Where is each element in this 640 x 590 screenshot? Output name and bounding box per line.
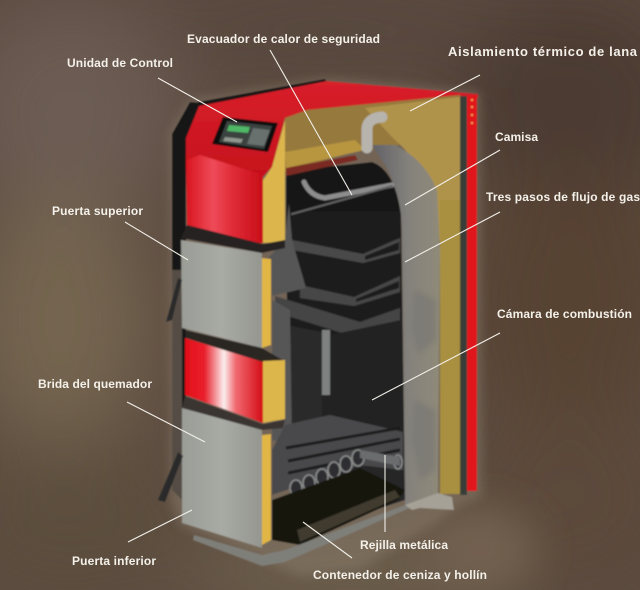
baffle inner shadow [365,242,399,260]
camisa blotches [412,290,436,480]
safety heat exhaust pipe [292,117,392,214]
right foot bracket [405,493,454,510]
label: Evacuador de calor de seguridad: Evacuador de calor de seguridad [187,32,380,46]
upper red strip inside [286,155,358,176]
camisa / jacket [372,145,440,505]
door gap shadow [181,225,285,253]
red strip with dots [467,96,477,491]
label: Contenedor de ceniza y hollín: Contenedor de ceniza y hollín [313,568,487,582]
label: Camisa: Camisa [495,130,538,144]
side slanted plate [266,203,306,296]
front wool block upper [263,120,285,243]
top black rim [198,79,328,108]
left inner wall [285,325,322,430]
label: Puerta superior: Puerta superior [52,204,143,218]
right back panel [330,320,403,420]
mid wool block [263,360,285,423]
leader lines [125,50,500,558]
side wool column [440,200,460,494]
label: Aislamiento térmico de lana: Aislamiento térmico de lana [448,44,638,59]
metal grate bars [272,415,403,496]
control unit [212,117,278,152]
lower door wool edge [262,434,271,545]
middle inner shadow [356,281,399,302]
lower gas baffle [275,296,400,338]
upper grey door [181,240,262,348]
label: Puerta inferior: Puerta inferior [72,554,156,568]
ash pan edge [297,490,400,542]
wool interior band [285,140,365,168]
mid gap shadow [185,330,286,362]
red top cover [186,81,478,178]
label: Unidad de Control: Unidad de Control [67,56,173,70]
label: Cámara de combustión: Cámara de combustión [497,307,632,321]
upper door wool edge [262,258,271,348]
left dark side panel [172,102,204,500]
soft halo around boiler [170,78,482,576]
interior dark chamber [286,162,405,515]
lower door handle [158,452,183,502]
middle gas baffle [300,276,400,306]
boiler illustration [158,78,482,576]
red front curved panel [186,155,263,243]
floor plate [193,505,412,566]
label: Rejilla metálica: Rejilla metálica [360,538,448,552]
dark strip [460,96,467,495]
label: Tres pasos de flujo de gas: Tres pasos de flujo de gas [486,190,640,204]
ash container [272,468,405,545]
grey support column [322,330,330,395]
gap above lower door [182,396,285,430]
label: Brida del quemador: Brida del quemador [38,377,152,391]
red mid panel [185,338,263,423]
left door jamb [272,300,292,445]
top right wool shading [365,97,460,240]
upper gas baffle [292,238,400,263]
side panel lower lighter [172,270,182,500]
lower grey door [182,408,262,548]
upper door handle [166,278,182,322]
interior back wool wall [285,95,460,200]
